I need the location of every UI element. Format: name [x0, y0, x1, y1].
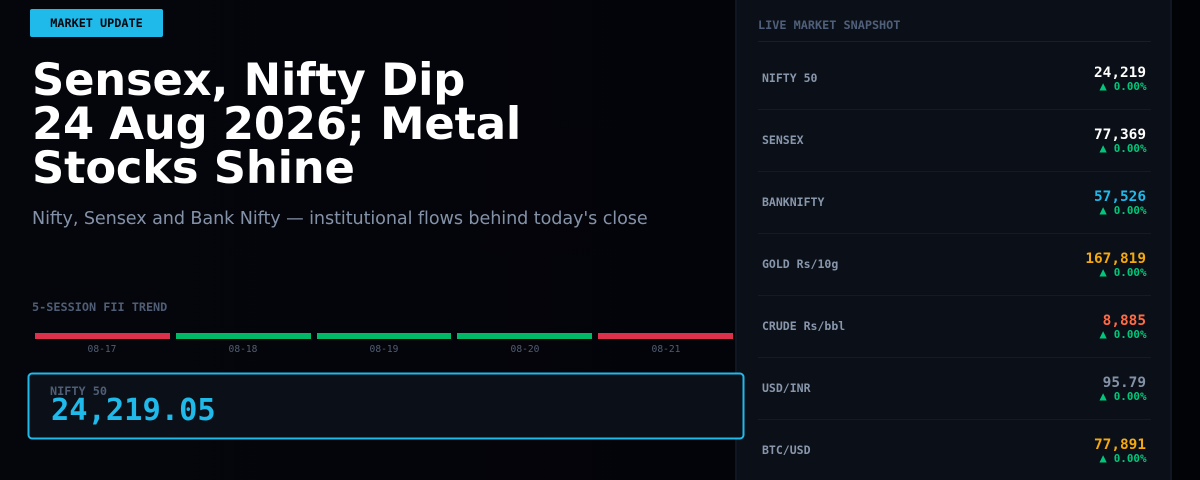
row: SENSEX: ▲ 0.00% — [1099, 141, 1146, 155]
title: 24 Aug 2026; Metal — [32, 97, 521, 150]
bar chart: 5-session FII trend: 08-19 — [370, 344, 398, 355]
row: BANKNIFTY: BANKNIFTY — [762, 195, 824, 209]
row: BANKNIFTY: 57,526 — [1094, 189, 1146, 205]
title: Stocks Shine — [32, 141, 355, 194]
row: BANKNIFTY: ▲ 0.00% — [1099, 203, 1146, 217]
row: CRUDE: 8,885 — [1103, 313, 1146, 329]
row: USD/INR: ▲ 0.00% — [1099, 389, 1146, 403]
bar chart: 5-session FII trend — [35, 333, 733, 355]
row: GOLD: 167,819 — [1085, 251, 1146, 267]
bar chart: 5-session FII trend: 08-20 — [511, 344, 539, 355]
row: NIFTY 50: 24,219 — [1094, 65, 1146, 81]
row: BTC/USD: 77,891 — [1094, 437, 1146, 453]
heading: FII trend: 5-SESSION FII TREND — [32, 300, 167, 314]
row: SENSEX: 77,369 — [1094, 127, 1146, 143]
row: NIFTY 50: ▲ 0.00% — [1099, 79, 1146, 93]
row: USD/INR: 95.79 — [1103, 375, 1146, 391]
row: NIFTY 50: NIFTY 50 — [762, 71, 817, 85]
callout: NIFTY 50 value — [28, 372, 744, 440]
row: GOLD: ▲ 0.00% — [1099, 265, 1146, 279]
row: BTC/USD — [762, 437, 1146, 465]
row: USD/INR: USD/INR — [762, 381, 811, 395]
panel: market snapshot — [735, 0, 1172, 480]
badge: market update — [30, 9, 163, 37]
row: SENSEX — [762, 127, 1146, 155]
row: SENSEX: SENSEX — [762, 133, 804, 147]
bar chart: 5-session FII trend: 08-21 — [652, 344, 680, 355]
row: GOLD: GOLD Rs/10g — [762, 257, 838, 271]
row: CRUDE: ▲ 0.00% — [1099, 327, 1146, 341]
row: BTC/USD: ▲ 0.00% — [1099, 451, 1146, 465]
row: BANKNIFTY — [762, 189, 1146, 217]
callout value: 24,219.05 — [51, 393, 216, 428]
row: NIFTY 50 — [762, 65, 1146, 93]
title — [32, 53, 521, 194]
row: GOLD — [762, 251, 1146, 279]
row: CRUDE: CRUDE Rs/bbl — [762, 319, 845, 333]
row: BTC/USD: BTC/USD — [762, 443, 811, 457]
bar chart: 5-session FII trend: 08-17 — [88, 344, 116, 355]
panel heading: LIVE MARKET SNAPSHOT — [758, 18, 900, 32]
row: USD/INR — [762, 375, 1146, 403]
bar chart: 5-session FII trend: 08-18 — [229, 344, 257, 355]
row: CRUDE — [762, 313, 1146, 341]
callout label: NIFTY 50 — [50, 384, 107, 398]
badge: market update: MARKET UPDATE — [50, 16, 143, 30]
subtitle: Nifty, Sensex and Bank Nifty — institutional flows behind today's close — [32, 209, 648, 229]
title: Sensex, Nifty Dip — [32, 53, 465, 106]
